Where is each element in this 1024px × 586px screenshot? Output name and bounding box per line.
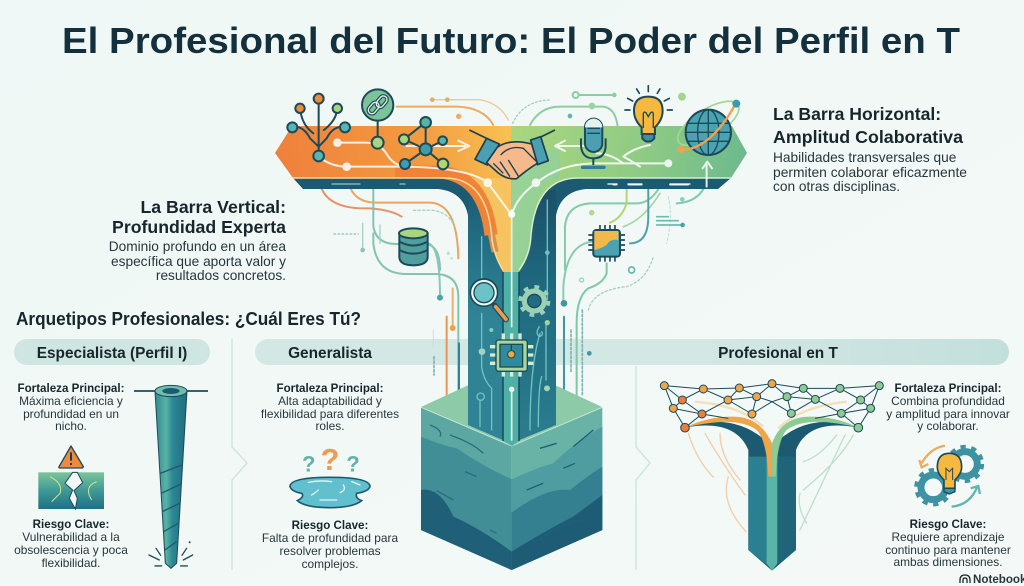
heading: Profesional en T: Profesional en T [718,345,838,362]
icon: gear [520,287,548,315]
T professional risk text [885,518,1011,569]
icon: central chip [490,333,533,377]
text block: vertical bar: resultados concretos. [156,268,286,283]
icon: handshake [469,130,555,179]
text block: horizontal bar [773,104,967,194]
generalist strength text [261,382,399,433]
stem icons [399,225,625,377]
specialist strength text: Máxima eficiencia y [19,394,123,408]
icon: microphone [581,119,606,167]
stem central strip [503,262,519,446]
icon: shallow puddle with question marks [290,443,370,508]
generalist strength text: Fortaleza Principal: [277,382,383,395]
icon: database [399,228,428,265]
text block: vertical bar: Dominio profundo en un área [109,239,286,254]
divider 1 [232,339,247,570]
specialist strength text: nicho. [55,419,87,433]
generalist risk text: Falta de profundidad para [262,531,398,545]
generalist risk text: complejos. [302,557,358,571]
text block: horizontal bar: permiten colaborar eficazmente [773,165,967,180]
T professional risk text: ambas dimensiones. [893,555,1003,569]
green half of horizontal bar [511,126,747,272]
pill: Especialista: Especialista (Perfil I) [37,345,187,362]
stem circuit traces [477,200,550,440]
icon: magnifying glass [470,279,506,319]
soil block faces [421,407,602,570]
T professional strength text: Fortaleza Principal: [895,382,1001,395]
connector lines lower left and right [373,210,653,411]
T professional risk text: Riesgo Clave: [910,518,986,531]
soil block top face [421,365,602,446]
white flow lines [319,139,712,217]
icon: deep narrow spike [134,385,208,568]
specialist strength text [18,382,124,433]
T professional risk text: Requiere aprendizaje [891,530,1005,544]
title: El Profesional del Futuro: El Poder del Perfil en T [62,20,960,61]
specialist strength text: profundidad en un [23,407,119,421]
specialist risk text: flexibilidad. [42,556,100,570]
T professional strength text [886,382,1010,433]
yellow flow core [470,178,511,272]
generalist strength text: flexibilidad para diferentes [261,407,399,421]
icon: shallow puddle with question marks: ? [346,452,360,477]
text block: vertical bar [109,197,286,283]
specialist risk text: Vulnerabilidad a la [22,530,120,544]
central T structure and soil block [275,126,747,570]
heading: archetypes: Arquetipos Profesionales: ¿Cuál Eres Tú? [16,309,361,329]
icon: shallow puddle with question marks: ? [321,443,339,477]
T professional strength text: Combina profundidad [891,394,1005,408]
T dark underside [293,178,731,260]
specialist strength text: Fortaleza Principal: [18,382,124,395]
icon: network tree [287,94,350,161]
specialist risk text: Riesgo Clave: [33,518,109,531]
stem right half [517,190,556,441]
heading: Generalista: Generalista [288,345,372,362]
text block: vertical bar: Profundidad Experta [112,217,286,237]
T professional strength text: y colaborar. [917,419,979,433]
T professional risk text: continuo para mantener [885,543,1011,557]
generalist risk text: resolver problemas [279,544,381,558]
text block: vertical bar: específica que aporta valor y [111,254,286,269]
generalist risk text [262,519,398,571]
text block: horizontal bar: Amplitud Colaborativa [773,127,963,147]
generalist strength text: Alta adaptabilidad y [278,394,382,408]
icon: gears with bulb [916,446,982,507]
icon: molecule network [399,117,448,169]
dark band highlights [332,183,690,185]
panel: specialist [14,382,208,570]
text block: horizontal bar: Habilidades transversales que [773,150,956,165]
icon: warning over cracked ground [38,446,104,509]
text block: vertical bar: La Barra Vertical: [140,197,286,217]
specialist risk text [14,518,128,570]
text block: horizontal bar: La Barra Horizontal: [773,104,941,124]
specialist risk text: obsolescencia y poca [14,543,128,557]
divider 2 [636,366,650,570]
heading band: Generalista and Profesional en T [255,339,1009,365]
generalist strength text: roles. [315,419,345,433]
pill: Especialista [14,339,210,365]
icon: shallow puddle with question marks: ? [302,452,315,477]
orange half of horizontal bar [275,126,511,272]
stem left half [468,190,505,441]
connector lines behind the T [319,92,708,270]
icon: chain link [362,89,393,149]
generalist risk text: Riesgo Clave: [292,519,368,532]
icon: globe with orbit [671,93,745,155]
icon: light bulb [625,86,672,142]
panel: generalist [261,382,399,571]
T professional strength text: y amplitud para innovar [886,407,1010,421]
small T with network [660,380,883,571]
text block: horizontal bar: con otras disciplinas. [773,179,900,194]
panel: T professional [660,380,1011,571]
bar flow lines and icons [287,86,745,217]
icon: chip upper right [588,225,625,262]
